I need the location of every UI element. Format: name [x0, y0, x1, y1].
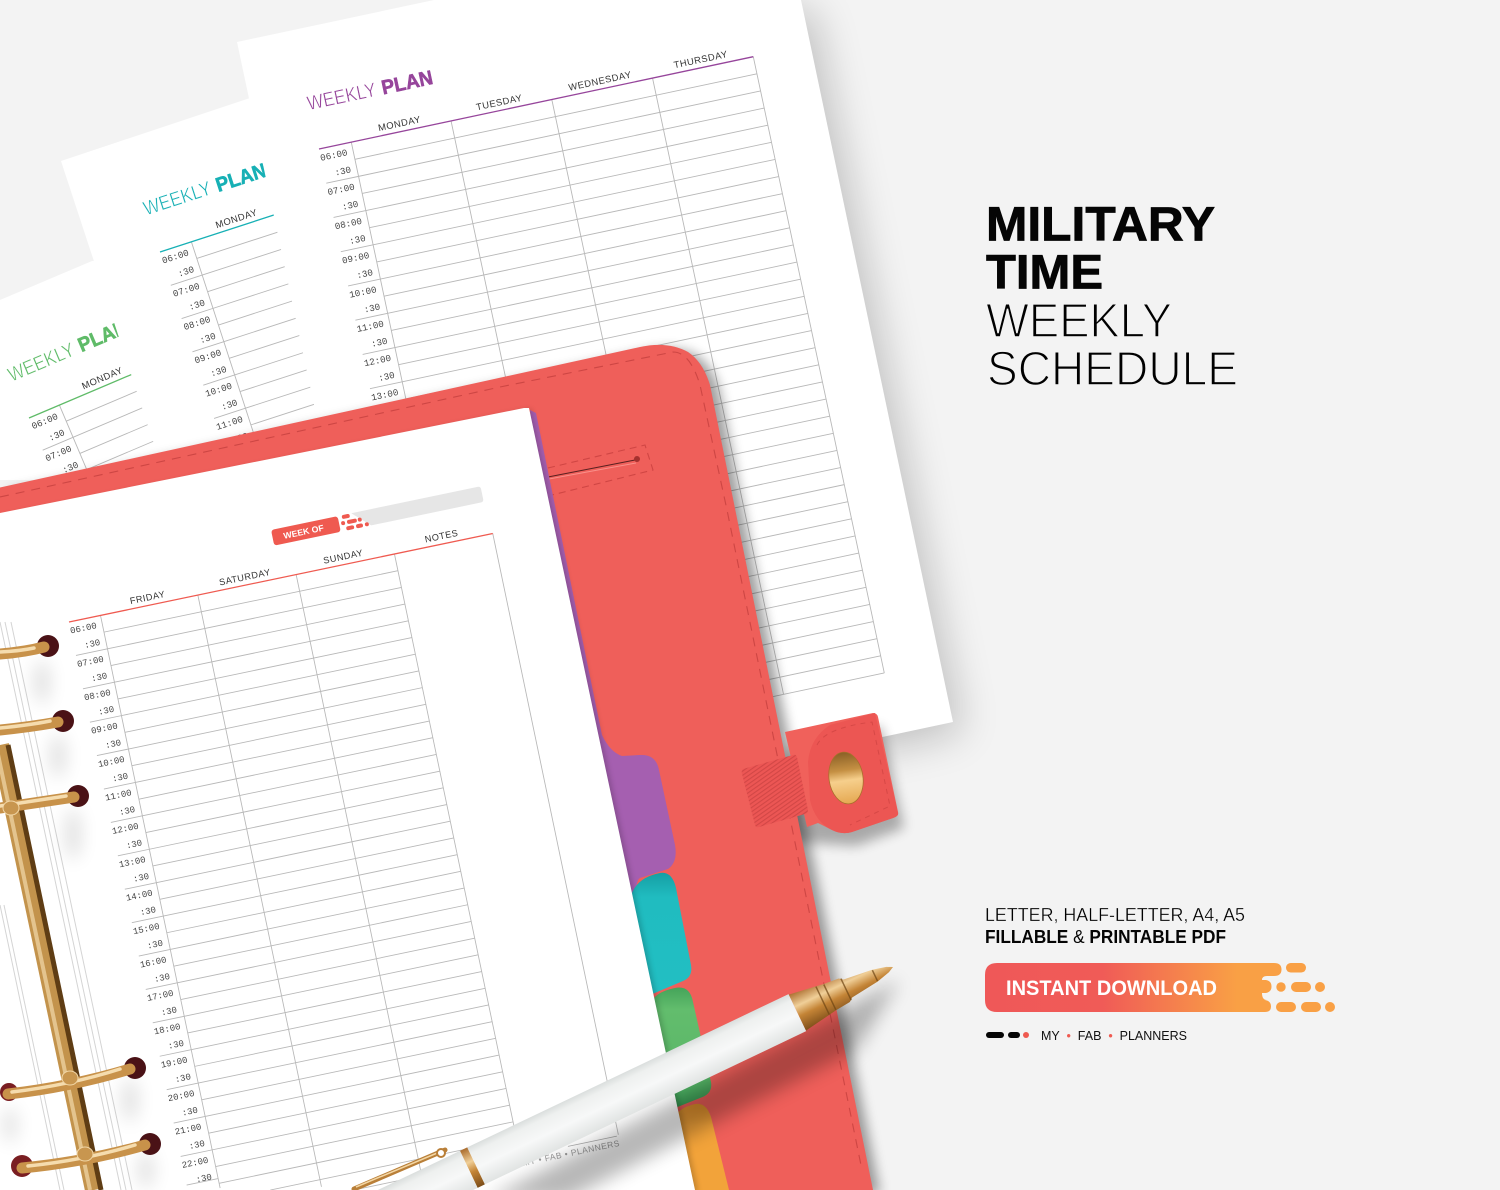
teal sheet times: 09:00: [193, 347, 223, 366]
green tab: [650, 988, 711, 1110]
teal sheet grid: [160, 115, 669, 518]
green sheet times: :30: [47, 427, 67, 444]
ring clasps: [3, 801, 93, 1161]
planner page times: 08:00: [83, 688, 112, 703]
planner cover: [0, 345, 873, 1190]
planner page times: [69, 621, 213, 1188]
green sheet title: PLAN: [75, 316, 131, 357]
pen rear section: [378, 1151, 478, 1190]
purple sheet times: :30: [348, 233, 367, 247]
shadow of planner cover: [9, 349, 880, 1190]
planner page times: 21:00: [174, 1122, 202, 1138]
teal sheet times: :30: [220, 397, 239, 413]
shadow of planner page: [3, 409, 698, 1190]
sheet: teal weekly plan: [141, 62, 669, 519]
planner page times: :30: [195, 1172, 213, 1185]
planner page times: 18:00: [153, 1022, 182, 1037]
planner page day labels: SUNDAY: [322, 548, 364, 566]
planner page schedule: [66, 521, 618, 1190]
sheet: green weekly plan: [5, 192, 547, 677]
title: TIME: [986, 246, 1103, 300]
teal sheet times: 10:00: [204, 381, 234, 400]
title: WEEKLY: [986, 295, 1172, 348]
planner page times: :30: [139, 905, 157, 918]
pen clip: [354, 1149, 445, 1189]
planner page grid: [69, 533, 618, 1190]
planner page times: :30: [153, 972, 171, 985]
planner page day labels: SATURDAY: [218, 567, 272, 587]
page footer logo: MY • FAB • PLANNERS: [521, 1138, 621, 1168]
purple sheet times: 09:00: [341, 250, 370, 266]
planner page times: 16:00: [139, 955, 168, 971]
planner page times: :30: [132, 872, 150, 885]
purple sheet times: 06:00: [319, 147, 349, 164]
title: SCHEDULE: [987, 343, 1238, 396]
planner page times: :30: [83, 638, 101, 651]
shadow of purple sheet: [510, 10, 963, 782]
planner page times: :30: [174, 1072, 192, 1085]
ring shadows: [4, 660, 153, 1188]
button label: INSTANT DOWNLOAD: [1006, 977, 1217, 1000]
cover stitching: [0, 352, 862, 1170]
planner page times: 17:00: [146, 989, 175, 1004]
button motif: [1276, 963, 1335, 1012]
planner page: friday to notes: [0, 408, 695, 1190]
purple sheet times: 13:00: [370, 387, 399, 403]
purple sheet times: :30: [334, 164, 352, 179]
green sheet times: [30, 411, 80, 480]
teal sheet times: 07:00: [172, 281, 201, 300]
planner page times: :30: [160, 1005, 178, 1018]
pen tip: [789, 949, 902, 1031]
week of field: [271, 486, 484, 546]
teal sheet times: [161, 247, 250, 450]
planner page times: 13:00: [118, 855, 147, 870]
pen barrel: [467, 994, 806, 1184]
planner page times: 06:00: [69, 621, 98, 637]
teal sheet times: :30: [177, 264, 196, 280]
purple sheet day labels: TUESDAY: [475, 92, 524, 112]
pen tip rings: [816, 962, 882, 1015]
planner page times: :30: [146, 939, 164, 952]
shadow of strap: [766, 726, 904, 846]
strap loop: [742, 755, 808, 827]
planner page day labels: FRIDAY: [129, 589, 166, 606]
planner page times: 15:00: [132, 922, 161, 937]
purple sheet title: PLAN: [380, 67, 435, 99]
planner page times: :30: [90, 671, 108, 684]
planner page times: :30: [167, 1039, 185, 1052]
purple sheet times: :30: [377, 370, 396, 384]
gold snap: [826, 750, 866, 806]
planner page times: :30: [125, 838, 143, 851]
planner page times: 14:00: [125, 888, 154, 904]
purple sheet title: [305, 67, 435, 115]
teal sheet day label: MONDAY: [214, 206, 259, 230]
planner page times: 11:00: [104, 788, 133, 804]
purple sheet title: WEEKLY: [305, 79, 378, 115]
shadow of pen: [486, 980, 899, 1190]
teal sheet title: PLAN: [213, 160, 269, 197]
green sheet times: 07:00: [44, 443, 73, 464]
spine: [0, 745, 101, 1190]
planner page times: :30: [111, 772, 129, 785]
plastic sleeve lines: [0, 622, 132, 1190]
purple sheet day labels: MONDAY: [377, 113, 422, 133]
purple sheet times: 08:00: [334, 216, 363, 232]
teal sheet times: 11:00: [215, 414, 244, 433]
planner page times: 22:00: [181, 1156, 209, 1171]
strap and snap closure: [742, 713, 898, 833]
planner page times: 19:00: [160, 1055, 188, 1071]
purple sheet times: :30: [370, 336, 389, 350]
purple sheet times: :30: [385, 404, 403, 418]
sheet: purple weekly plan: [305, 1, 884, 766]
pocket slit and stitching: [548, 445, 653, 495]
purple sheet day labels: [377, 48, 729, 133]
planner page times: 12:00: [111, 822, 140, 837]
planner page times: :30: [188, 1139, 206, 1152]
purple sheet day labels: THURSDAY: [673, 48, 729, 70]
teal sheet times: :30: [209, 364, 228, 380]
teal sheet times: :30: [198, 331, 217, 346]
teal sheet times: :30: [187, 297, 207, 313]
planner page times: :30: [104, 738, 122, 751]
ring bands: [0, 647, 145, 1168]
purple sheet times: 11:00: [356, 318, 385, 335]
green sheet grid: [29, 245, 547, 676]
planner page times: 20:00: [167, 1089, 195, 1104]
teal sheet times: :30: [231, 431, 250, 446]
sizes line: LETTER, HALF-LETTER, A4, A5: [985, 905, 1245, 925]
title: [986, 198, 1238, 396]
green sheet day label: MONDAY: [80, 364, 124, 391]
teal sheet times: 06:00: [161, 247, 190, 266]
binder rings: [0, 635, 161, 1190]
brand logo: MY • FAB • PLANNERS: [1041, 1029, 1187, 1043]
orange tab: [670, 1104, 729, 1190]
planner page times: 07:00: [76, 655, 105, 670]
divider tabs: [530, 410, 729, 1190]
green sheet title: WEEKLY: [5, 339, 78, 387]
green sheet title: [5, 316, 131, 387]
purple sheet times: 12:00: [363, 353, 392, 369]
teal tab: [630, 873, 691, 995]
teal sheet paper: [61, 98, 500, 520]
purple sheet times: 10:00: [348, 284, 378, 301]
pen: [354, 948, 902, 1190]
green sheet times: 06:00: [30, 411, 60, 432]
title: MILITARY: [986, 198, 1215, 252]
planner page day labels: NOTES: [424, 528, 459, 545]
planner page times: 10:00: [97, 755, 126, 770]
week of field: WEEK OF: [282, 523, 325, 541]
teal sheet title: [141, 160, 269, 220]
instant download button: [985, 963, 1335, 1012]
purple sheet times: :30: [341, 199, 359, 213]
purple strip and tab: [530, 410, 676, 1000]
teal sheet title: WEEKLY: [141, 178, 214, 220]
format line: FILLABLE & PRINTABLE PDF: [985, 927, 1226, 947]
planner page times: :30: [118, 805, 136, 818]
purple sheet grid: [319, 57, 884, 765]
purple sheet times: :30: [356, 267, 374, 281]
planner page times: :30: [97, 705, 115, 718]
purple sheet day labels: WEDNESDAY: [567, 68, 633, 93]
planner page times: 09:00: [90, 721, 119, 737]
planner page day labels: [129, 528, 459, 606]
purple sheet times: [319, 147, 403, 421]
purple sheet paper: [237, 0, 953, 838]
pen gold band: [460, 1147, 485, 1188]
green sheet paper: [0, 261, 300, 480]
ring holes: [0, 635, 161, 1177]
purple sheet times: 07:00: [327, 182, 356, 198]
purple sheet times: :30: [363, 301, 381, 316]
planner page times: :30: [181, 1106, 199, 1119]
green sheet times: :30: [61, 459, 80, 476]
teal sheet times: 08:00: [182, 314, 212, 333]
